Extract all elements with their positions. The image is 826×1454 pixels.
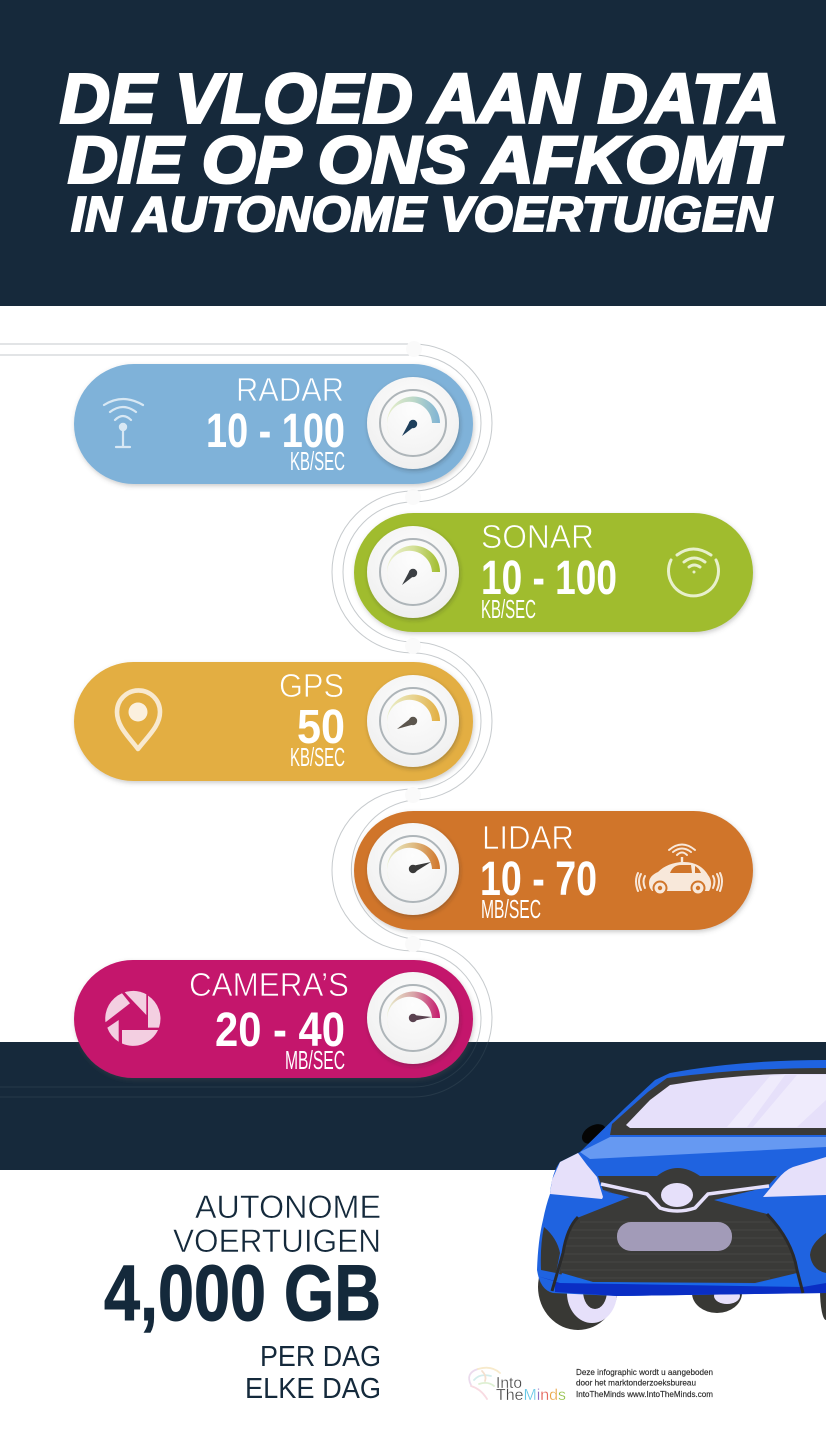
gps value: 50 (297, 701, 345, 754)
lidar unit: MB/SEC (481, 894, 541, 924)
right headlight (763, 1157, 826, 1197)
credit text: IntoTheMinds www.IntoTheMinds.com (576, 1389, 713, 1399)
windshield reflections (727, 1075, 826, 1127)
title (60, 60, 783, 242)
icon: camera aperture (105, 991, 160, 1046)
brain mark (469, 1368, 500, 1399)
logo: IntoTheMinds (469, 1368, 566, 1404)
sonar unit: KB/SEC (481, 594, 536, 624)
connector lines on dark band (0, 1042, 488, 1097)
chrome trim (601, 1184, 769, 1211)
radar label: RADAR (236, 371, 344, 408)
sonar label: SONAR (481, 518, 594, 555)
radar value: 10 - 100 (206, 405, 345, 458)
navy bottom strip (537, 1276, 826, 1296)
windshield glass (626, 1074, 826, 1128)
gauge: sonar (367, 526, 459, 618)
panel: radar (74, 364, 473, 484)
windshield frame (610, 1068, 826, 1135)
stat: autonome voertuigen: AUTONOME (195, 1189, 381, 1225)
title: DIE OP ONS AFKOMT (68, 122, 783, 196)
gauge: radar (367, 377, 459, 469)
cameras label: CAMERA’S (189, 966, 349, 1003)
title: IN AUTONOME VOERTUIGEN (71, 188, 774, 242)
gps label: GPS (279, 667, 344, 704)
illustration: blue car (537, 1060, 826, 1330)
grille stripes (561, 1222, 796, 1278)
panel: lidar (354, 811, 753, 930)
panel: gps (74, 662, 473, 781)
mirror (578, 1120, 610, 1148)
credit text: Deze infographic wordt u aangeboden (576, 1367, 713, 1377)
upper grille (598, 1168, 777, 1200)
lidar label: LIDAR (482, 819, 574, 856)
emblem (661, 1183, 693, 1207)
cameras unit: MB/SEC (285, 1045, 345, 1075)
grille outlines (552, 1214, 803, 1293)
number plate (617, 1222, 732, 1251)
panel: cameras (74, 960, 473, 1078)
side vents (541, 1227, 826, 1273)
connector nodes (405, 341, 422, 952)
logo: IntoTheMinds: TheMinds (496, 1387, 566, 1404)
stat: per dag elke dag: ELKE DAG (245, 1373, 381, 1405)
icon: radar antenna (104, 399, 143, 447)
gauge: cameras (367, 972, 459, 1064)
stat: 4,000 GB: 4,000 GB (104, 1248, 381, 1337)
title: DE VLOED AAN DATA (60, 60, 779, 138)
dark band (0, 1042, 826, 1170)
connector lines (0, 344, 492, 1097)
credit text (576, 1367, 713, 1399)
lidar value: 10 - 70 (480, 853, 597, 906)
lower grille (559, 1191, 797, 1283)
stat: autonome voertuigen (173, 1189, 381, 1259)
radar unit: KB/SEC (290, 446, 345, 476)
cameras value: 20 - 40 (215, 1004, 345, 1057)
sonar value: 10 - 100 (481, 552, 617, 605)
icon: autonomous car (636, 844, 722, 896)
wordmark: Into (496, 1375, 522, 1392)
car body (537, 1060, 826, 1296)
icon: gps pin (117, 690, 160, 749)
rear wheels (538, 1244, 826, 1330)
icon: sonar wifi (668, 549, 718, 596)
stat: per dag elke dag (245, 1341, 381, 1405)
gauge: gps (367, 675, 459, 767)
panel: sonar (354, 513, 753, 632)
header band (0, 0, 826, 306)
gps unit: KB/SEC (290, 742, 345, 772)
left headlight (550, 1153, 603, 1199)
hood highlight (580, 1137, 826, 1159)
gauge: lidar (367, 823, 459, 915)
lower lip (556, 1273, 803, 1296)
stat: per dag elke dag: PER DAG (260, 1341, 381, 1373)
credit text: door het marktonderzoeksbureau (576, 1378, 696, 1388)
stat: autonome voertuigen: VOERTUIGEN (173, 1223, 381, 1259)
